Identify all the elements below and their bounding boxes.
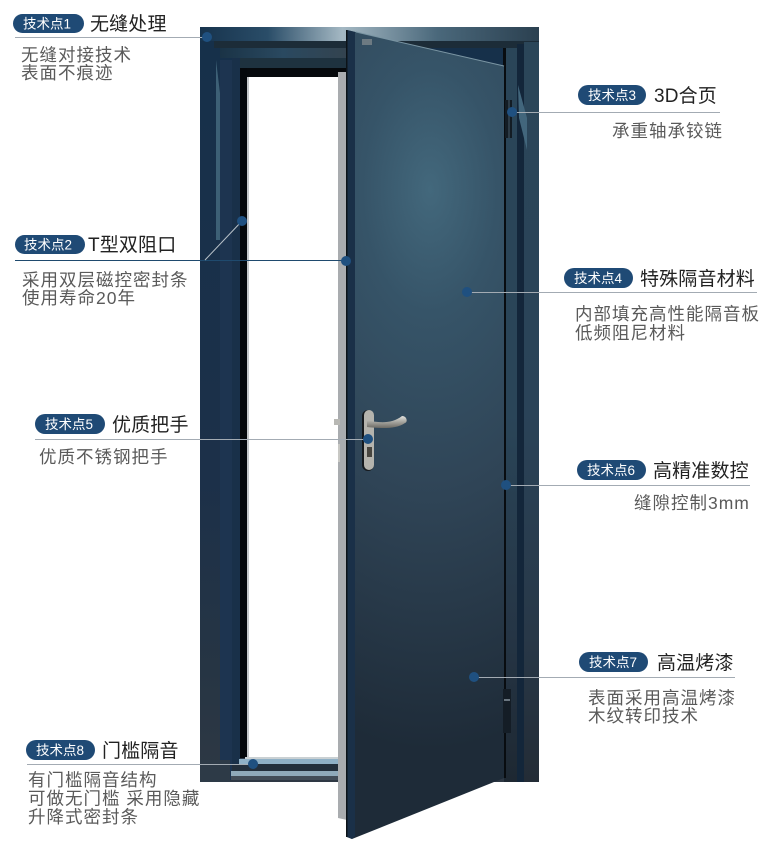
badge 3: 技术点3 <box>588 88 636 103</box>
callout 4: acoustic material <box>462 268 760 343</box>
callout 1: seamless <box>13 13 212 83</box>
heading 6: 高精准数控 <box>653 460 749 482</box>
description 4: 内部填充高性能隔音板 <box>575 304 760 324</box>
door frame <box>200 27 539 782</box>
dot 3 <box>507 107 517 117</box>
dot 8 <box>248 759 258 769</box>
door jamb strip <box>338 72 347 820</box>
threshold <box>200 757 338 782</box>
badge 7 <box>579 652 648 672</box>
heading 7: 高温烤漆 <box>657 652 734 674</box>
dot 5 <box>363 434 373 444</box>
badge 8 <box>26 740 95 760</box>
description 8: 可做无门槛 采用隐藏 <box>28 788 200 808</box>
badge 3 <box>578 85 646 105</box>
dot 6 <box>501 480 511 490</box>
callout 3: 3D hinge <box>507 85 723 141</box>
badge 2 <box>15 235 85 254</box>
top hinge <box>505 100 512 138</box>
description 8: 有门槛隔音结构 <box>28 770 158 790</box>
handle <box>334 410 407 471</box>
leader line 5 <box>35 438 368 440</box>
description 7: 木纹转印技术 <box>588 706 699 726</box>
leader line 8 <box>27 764 253 766</box>
badge 6 <box>577 460 646 480</box>
description 6: 缝隙控制3mm <box>634 493 750 513</box>
description 2: 使用寿命20年 <box>22 288 136 308</box>
description 3: 承重轴承铰链 <box>612 121 723 141</box>
callout 5: handle <box>35 414 373 467</box>
heading 8: 门槛隔音 <box>102 740 179 762</box>
description 2: 采用双层磁控密封条 <box>22 270 188 290</box>
heading 5: 优质把手 <box>112 414 189 436</box>
leader line 7 <box>474 676 735 678</box>
description 8: 升降式密封条 <box>28 807 139 827</box>
leader line 3 <box>512 112 720 114</box>
badge 8: 技术点8 <box>36 743 84 758</box>
bottom hinge <box>503 689 511 733</box>
badge 5 <box>35 414 105 434</box>
badge 4 <box>564 268 633 288</box>
badge 4: 技术点4 <box>574 271 622 286</box>
callout 8: threshold <box>26 740 258 827</box>
heading 1: 无缝处理 <box>90 13 167 35</box>
heading 3: 3D合页 <box>654 85 717 107</box>
door opening <box>247 77 338 757</box>
door leaf <box>346 30 504 839</box>
description 1: 无缝对接技术 <box>21 45 132 65</box>
description 1: 表面不痕迹 <box>21 63 114 83</box>
callout 2: T seal <box>15 216 351 308</box>
badge 5: 技术点5 <box>45 417 93 432</box>
badge 1: 技术点1 <box>23 16 71 32</box>
badge 7: 技术点7 <box>589 655 637 670</box>
description 4: 低频阻尼材料 <box>575 323 686 343</box>
dot 1 <box>202 32 212 42</box>
leader line 1 <box>15 36 207 38</box>
callout 7: baking paint <box>469 652 736 726</box>
leader line 4 <box>467 292 757 294</box>
door illustration <box>200 27 539 839</box>
dot 7 <box>469 672 479 682</box>
description 5: 优质不锈钢把手 <box>39 447 168 467</box>
leader line 6 <box>506 484 750 486</box>
heading 4: 特殊隔音材料 <box>640 268 755 290</box>
dot 4 <box>462 287 472 297</box>
callout 6: CNC <box>501 460 750 513</box>
leader line 2 <box>15 221 346 260</box>
dots 2 <box>237 216 351 266</box>
badge 1 <box>13 14 84 33</box>
badge 6: 技术点6 <box>587 463 635 478</box>
badge 2: 技术点2 <box>24 238 72 252</box>
heading 2: T型双阻口 <box>88 234 176 256</box>
description 7: 表面采用高温烤漆 <box>588 688 736 708</box>
